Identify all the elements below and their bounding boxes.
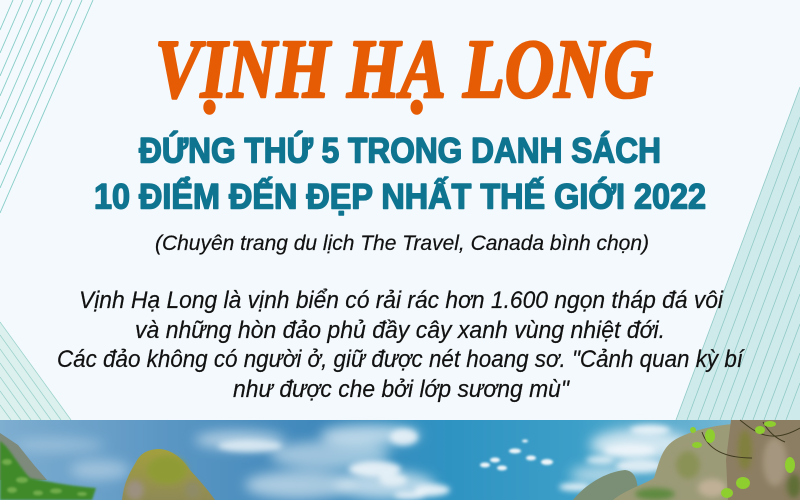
photo tree branches and leaves — [690, 420, 800, 498]
decorative panel: bottom-left stripes — [0, 322, 71, 420]
photo right cliffs — [613, 424, 745, 500]
title: VỊNH HẠ LONG — [155, 23, 653, 116]
subtitle — [94, 130, 706, 216]
photo clouds — [15, 425, 690, 499]
body line 3: Các đảo không có người ở, giữ được nét hoang sơ. "Cảnh quan kỳ bí — [57, 346, 745, 373]
decorative panel: top-left stripes — [0, 0, 93, 213]
photo right small hill — [573, 470, 640, 500]
source note: (Chuyên trang du lịch The Travel, Canada bình chọn) — [155, 232, 649, 255]
photo left cliff and foliage — [0, 433, 96, 500]
photo central karst hill — [122, 449, 215, 500]
body line 4: như được che bởi lớp sương mù" — [233, 376, 570, 403]
subtitle line 1: ĐỨNG THỨ 5 TRONG DANH SÁCH — [139, 130, 661, 170]
decorative panel: right stripes — [676, 87, 800, 420]
body line 1: Vịnh Hạ Long là vịnh biển có rải rác hơn 1.600 ngọn tháp đá vôi — [79, 287, 724, 314]
photo sky — [0, 420, 800, 500]
body line 2: và những hòn đảo phủ đầy cây xanh vùng nhiệt đới. — [135, 317, 665, 344]
photo rock tower — [726, 420, 800, 500]
photo: Ha Long Bay landscape — [0, 420, 800, 500]
body text — [57, 287, 745, 403]
subtitle line 2: 10 ĐIỂM ĐẾN ĐẸP NHẤT THẾ GIỚI 2022 — [94, 176, 706, 216]
